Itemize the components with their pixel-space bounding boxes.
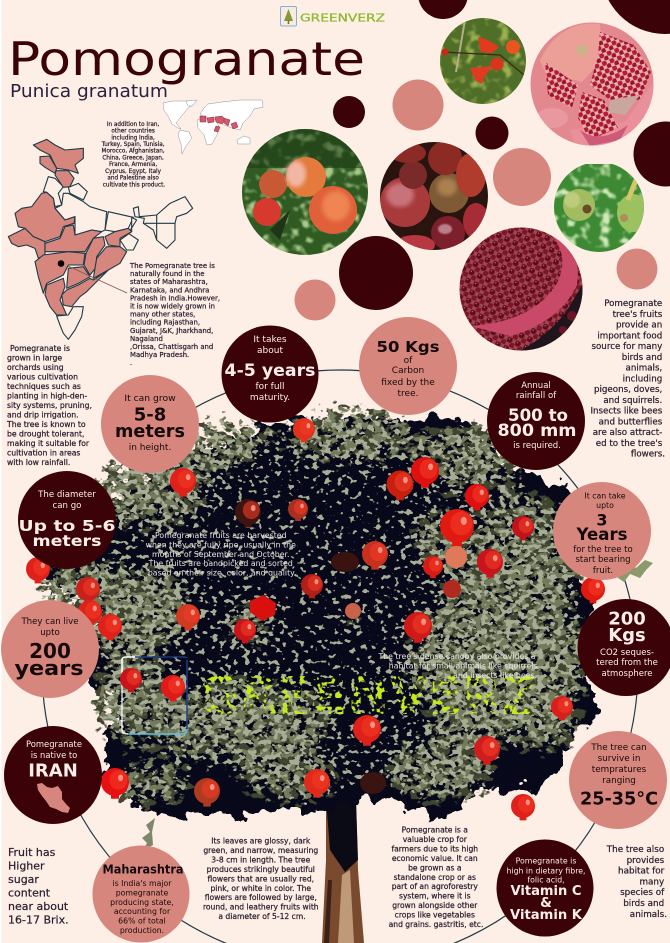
brand logo xyxy=(280,6,386,26)
text: leaves and flowers: green, and narrow, measuring xyxy=(203,846,318,855)
text: habitat for birds: birds and xyxy=(623,899,664,909)
text: where the tree is found: Nagaland xyxy=(130,335,163,343)
text: other growing countries: Morocco, Afghanistan, xyxy=(102,149,165,155)
text: where the tree is found: Karnataka, and Andhra xyxy=(130,286,209,294)
fact circle: Maharashtra: accounting for xyxy=(114,907,171,916)
text: where the tree is found: states of Maharashtra, xyxy=(130,278,208,286)
tree canopy xyxy=(32,403,653,850)
fact circle: CO2: CO2 seques- xyxy=(600,648,654,658)
fact circle: vitamins: Pomegranate is xyxy=(516,856,576,866)
fact circle: temperature: survive in xyxy=(598,754,640,764)
fact circle: vitamins: & xyxy=(540,895,552,911)
fact circle: CO2: atmosphere xyxy=(602,669,652,679)
text: food source: tree's fruits xyxy=(613,310,663,320)
text: where the tree is found: many other states, xyxy=(130,311,195,319)
fact circle: rainfall xyxy=(487,372,585,470)
fact circle: native to Iran: is native to xyxy=(31,750,77,760)
fact circle: Maharashtra: producing state, xyxy=(110,898,174,907)
fact circle: height: meters xyxy=(115,421,185,442)
text: food source: important food xyxy=(597,331,662,341)
fact circle: maturity: maturity. xyxy=(250,393,290,403)
fact circle: carbon: 50 Kgs xyxy=(376,338,440,356)
text: economic value: farmers due to its high xyxy=(391,844,478,853)
fact circle: carbon: of xyxy=(404,356,413,366)
fact circle: maturity: 4-5 years xyxy=(224,361,316,380)
text: other growing countries: cultivate this product. xyxy=(103,182,165,188)
fact circle: Maharashtra: pomegranate xyxy=(116,888,169,898)
fact circle: diameter: meters xyxy=(32,532,102,550)
text: food source: flowers. xyxy=(631,450,665,460)
photo: fruit on the tree xyxy=(240,128,370,256)
fact circle: vitamins: folic acid, xyxy=(527,876,565,884)
fact circle: height: in height. xyxy=(129,443,171,453)
text: economic value: be grown as a xyxy=(408,863,462,872)
text: habitat for birds: animals. xyxy=(630,910,667,920)
fact circle: lifespan: They can live xyxy=(20,617,79,627)
text: leaves and flowers: a diameter of 5-12 cm. xyxy=(218,912,306,921)
fact circle: Maharashtra: is India's major xyxy=(112,879,172,888)
text: other growing countries: and Palestine also xyxy=(107,176,159,182)
text: leaves and flowers: 3-8 cm in length. The tree xyxy=(211,856,311,864)
text: where the tree is found: Pradesh in India.However, xyxy=(130,294,220,302)
fact circle: rainfall: Annual xyxy=(521,381,551,391)
fact circle: bearing fruit: It can take xyxy=(584,492,626,500)
text: cultivation: be drought tolerant, xyxy=(7,430,84,438)
fact circle: native to Iran xyxy=(4,726,102,824)
fact circle: diameter: Up to 5-6 xyxy=(18,517,116,535)
text: economic value: part of an agroforestry xyxy=(392,882,478,891)
text: other growing countries: Turkey, Spain, Tunisia, xyxy=(101,142,165,148)
photo: opened pomegranate xyxy=(530,22,655,147)
text: where the tree is found: Madhya Pradesh. xyxy=(130,351,189,359)
text: cultivation: Pomegranate is xyxy=(10,344,70,353)
fact circle: bearing fruit: Years xyxy=(575,525,628,544)
text: cultivation: and drip irrigation. xyxy=(7,410,79,420)
fact circle: bearing fruit: 3 xyxy=(596,510,608,530)
text: cultivation: grown in large xyxy=(7,354,62,362)
fact circle: maturity: It takes xyxy=(253,335,287,345)
text: economic value: crops like vegetables xyxy=(395,911,475,920)
text: leaves and flowers: flowers are followed by large, xyxy=(205,893,317,902)
fact circle: bearing fruit xyxy=(553,482,651,580)
text: sugar content: near about xyxy=(8,900,69,913)
scientific name: Punica granatum xyxy=(10,82,168,102)
text: cultivation: orchards using xyxy=(7,363,64,372)
fact circle: carbon: Carbon xyxy=(392,366,424,376)
text: leaves and flowers: produces strikingly beautiful xyxy=(207,865,315,874)
photo: pomegranate flowers on branch xyxy=(440,18,526,104)
fact circle: carbon: fixed by the xyxy=(381,378,435,388)
fact circle: lifespan xyxy=(1,600,99,698)
title: Pomogranate xyxy=(8,32,365,86)
fact circle: maturity xyxy=(222,326,318,422)
text: food source: Insects like bees xyxy=(590,406,663,416)
text: economic value: economic value. It can xyxy=(392,854,478,863)
fact circle: CO2: Kgs xyxy=(608,625,646,646)
fact circle: bearing fruit: fruit. xyxy=(593,566,613,576)
text: cultivation: planting in high-den- xyxy=(7,392,87,400)
fact circle: temperature: ranging xyxy=(602,776,636,786)
fact circle: temperature xyxy=(569,731,667,829)
tree trunk xyxy=(322,800,364,943)
text: leaves and flowers: pink, or white in color. The xyxy=(210,884,311,893)
text: leaves and flowers: round, and leathery fruits with xyxy=(203,903,319,912)
fact circle: lifespan: 200 xyxy=(29,639,71,663)
text: other growing countries: Cyprus, Egypt, Italy xyxy=(105,169,162,175)
fact circle: vitamins: Vitamin C xyxy=(510,883,582,899)
pomegranate fruits on the tree xyxy=(26,418,605,820)
fact circle: height: It can grow xyxy=(124,393,176,404)
text: leaves and flowers: flowers that are usually red, xyxy=(208,874,314,883)
fact circle: rainfall: rainfall of xyxy=(516,391,557,401)
text: economic value: grown alongside other xyxy=(392,901,478,910)
text: other growing countries: China, Greece, Japan, xyxy=(102,155,164,161)
text: food source: birds and xyxy=(622,353,662,363)
fact circle: Maharashtra: Maharashtra xyxy=(102,862,184,876)
text: economic value: valuable crop for xyxy=(403,835,468,844)
fact circle: Maharashtra: 66% of total xyxy=(118,916,166,926)
text: where the tree is found: . xyxy=(130,359,132,367)
fact circle: diameter: can go xyxy=(53,501,81,511)
green watermark over the tree xyxy=(122,657,538,734)
text on tree: habitat: and insects like bees. xyxy=(453,671,537,680)
text on tree: harvest: based on their size, color, and quality. xyxy=(148,568,296,578)
text on tree: harvest: months of September and October. xyxy=(152,550,290,559)
fact circle: temperature: 25-35°C xyxy=(580,788,658,810)
text on tree: habitat: The tree's dense canopy also provides a xyxy=(377,652,536,661)
text: food source: and squirrels. xyxy=(603,396,662,406)
fact circle: Maharashtra xyxy=(92,846,190,942)
text: habitat for birds: The tree also xyxy=(606,845,664,855)
text: food source: and butterflies xyxy=(599,417,663,427)
text: food source: animals, xyxy=(626,364,662,374)
fact circle: rainfall: is required. xyxy=(513,441,561,451)
fact circle: maturity: about xyxy=(257,346,283,356)
text: cultivation: making it suitable for xyxy=(7,439,90,448)
text: where the tree is found: including Rajasthan, xyxy=(130,319,200,327)
text: where the tree is found: ,Orissa, Chattisgarh and xyxy=(130,343,213,351)
text: other growing countries: France, Armenia, xyxy=(109,162,157,168)
fact circle: height: 5-8 xyxy=(134,404,166,426)
text: habitat for birds: provides xyxy=(627,856,665,866)
text: where the tree is found: The Pomegranate tree is xyxy=(129,262,215,270)
text: economic value: Pomegranate is a xyxy=(402,826,468,834)
fact circle: bearing fruit: start bearing xyxy=(576,555,630,565)
text: cultivation: techniques such as xyxy=(7,382,81,391)
text: cultivation: sity systems, pruning, xyxy=(7,401,92,410)
fact circle: lifespan: years xyxy=(14,656,84,680)
text: other growing countries: including India, xyxy=(111,135,155,141)
fact circle: diameter: The diameter xyxy=(37,490,96,500)
fact circle: height xyxy=(101,375,199,473)
world map xyxy=(163,100,263,154)
text: where the tree is found: Gujarat, J&K, Jharkhand, xyxy=(130,327,213,335)
text: where the tree is found: naturally found in the xyxy=(130,270,205,278)
fact circle: rainfall: 800 mm xyxy=(498,421,576,441)
text: food source: ed to the tree's xyxy=(596,439,663,449)
fact circle: CO2: tered from the xyxy=(596,658,658,668)
text: food source: including xyxy=(623,374,662,384)
fact circle: maturity: for full xyxy=(255,382,285,392)
location marker and leader line xyxy=(58,260,127,293)
fact circle: CO2 xyxy=(578,599,670,696)
fact circle: vitamins xyxy=(496,840,594,936)
text: food source: pigeons, doves, xyxy=(594,385,662,395)
fact circle: CO2: 200 xyxy=(608,608,646,630)
text on tree: harvest: when they are fully ripe, usually in the xyxy=(146,540,296,550)
photo: green unripe fruits xyxy=(554,164,649,254)
text on tree: harvest: Pomegranate fruits are harvested xyxy=(155,531,287,540)
text: where the tree is found: it is now widely grown in xyxy=(130,302,215,310)
fact circle: carbon xyxy=(359,317,457,415)
text: other growing countries: In addition to Iran, xyxy=(107,122,160,128)
fact circle: bearing fruit: for the tree to xyxy=(573,545,633,555)
text on tree: habitat: habitat for small animals like squirrels xyxy=(389,661,538,670)
fact circle: diameter xyxy=(18,471,116,569)
fact circle: temperature: tempratures xyxy=(592,765,647,775)
left page edge xyxy=(0,0,2,943)
fact circle: rainfall: 500 to xyxy=(508,406,568,426)
text: cultivation: with low rainfall. xyxy=(7,458,70,467)
green watermark over the tree: GREENVERZ xyxy=(198,667,538,727)
text: economic value: and grains. gastritis, etc. xyxy=(389,920,483,929)
text: food source: provide an xyxy=(616,320,662,330)
ring connecting the facts xyxy=(42,370,638,943)
text: cultivation: The tree is known to xyxy=(6,420,86,429)
fact circle: lifespan: upto xyxy=(40,628,60,638)
fact circle: native to Iran: IRAN xyxy=(28,760,78,782)
text on tree: harvest: The fruits are handpicked and sorted xyxy=(148,559,293,568)
text: food source: source for many xyxy=(591,342,662,352)
text: habitat for birds: many xyxy=(639,877,664,887)
text: other growing countries: other countries xyxy=(111,129,155,135)
text: cultivation: various cultivation xyxy=(7,372,78,382)
text: economic value: system, where it is xyxy=(399,892,471,901)
fact circle: Maharashtra: production. xyxy=(120,926,164,935)
fact circle: temperature: The tree can xyxy=(590,743,647,753)
fact circle: native to Iran: Pomegranate xyxy=(26,739,82,749)
text: sugar content: content xyxy=(8,886,51,900)
text: food source: are also attract- xyxy=(593,428,662,438)
brand logo: GREENVERZ xyxy=(300,12,386,24)
photo: cut pomegranate seeds xyxy=(458,227,585,352)
text: habitat for birds: habitat for xyxy=(618,867,665,877)
fact circle: bearing fruit: upto xyxy=(596,501,614,510)
text: leaves and flowers: Its leaves are glossy, dark xyxy=(211,836,311,846)
text: sugar content: Higher xyxy=(8,860,45,872)
text: cultivation: cultivation in areas xyxy=(7,448,80,458)
text: food source: Pomegranate xyxy=(604,299,662,309)
text: economic value: standalone crop or as xyxy=(394,873,476,882)
text: sugar content: 16-17 Brix. xyxy=(8,914,69,926)
text: sugar content: sugar xyxy=(8,873,39,886)
text: habitat for birds: species of xyxy=(620,888,665,898)
fact circle: vitamins: high in dietary fibre, xyxy=(506,866,586,876)
fact circle: carbon: tree. xyxy=(398,389,418,399)
photo: pile of pomegranates xyxy=(379,141,490,255)
fact circle: vitamins: Vitamin K xyxy=(510,907,583,923)
india map xyxy=(8,139,193,339)
text: sugar content: Fruit has xyxy=(8,846,56,859)
decorative circles xyxy=(294,0,670,320)
